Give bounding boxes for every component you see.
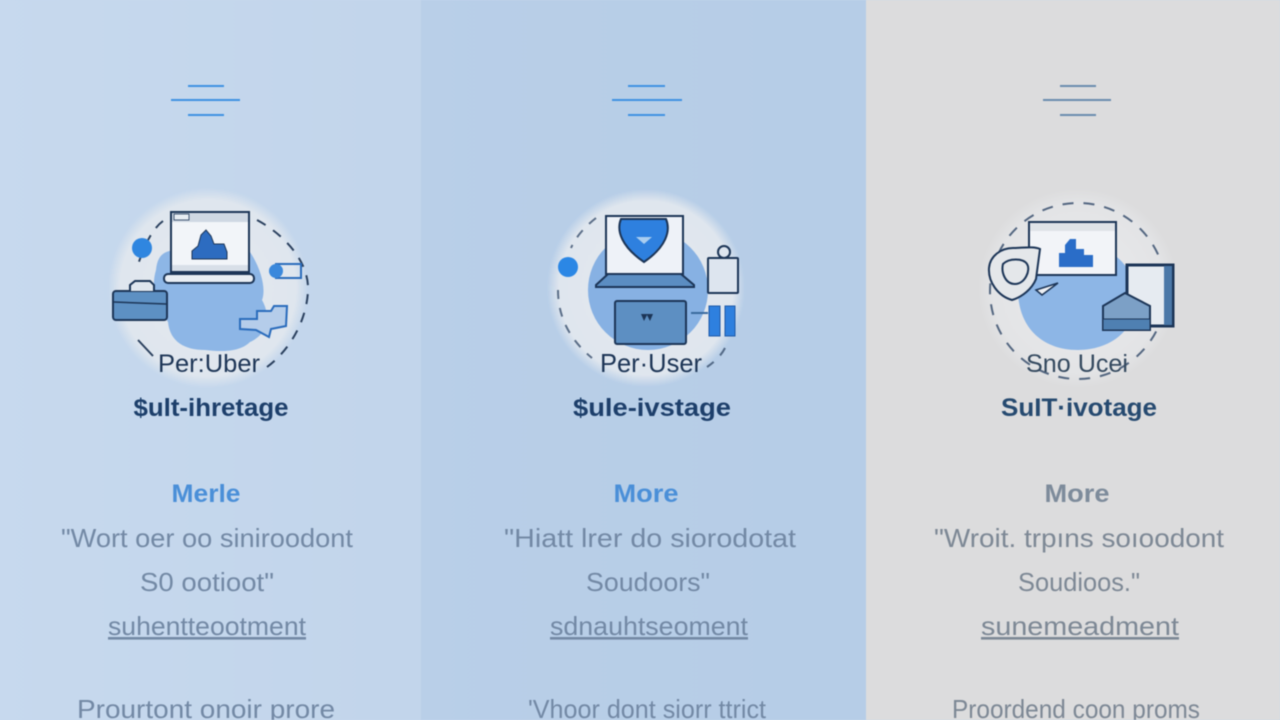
description: Soudioos." <box>1018 567 1140 597</box>
description: "Wort oer oo siniroodont <box>61 523 354 553</box>
description <box>61 523 354 720</box>
link label: More <box>1044 480 1110 508</box>
icon: security illustration <box>547 189 745 387</box>
description: sdnauhtseoment <box>550 611 749 641</box>
label: Per:Uber <box>158 350 260 378</box>
icon: menu lines <box>171 86 240 115</box>
description: sunemeadment <box>981 611 1180 641</box>
description: Soudoors" <box>586 567 710 597</box>
icon: workspace illustration <box>108 188 308 388</box>
icon: document illustration <box>978 188 1178 388</box>
heading: $ult-ihretage <box>134 394 289 422</box>
description <box>934 523 1225 720</box>
icon: menu lines <box>612 86 682 115</box>
heading: $ule-ivstage <box>573 394 731 422</box>
panel: middle tier <box>421 0 866 720</box>
panel: left tier <box>0 0 421 720</box>
link label: Merle <box>172 480 241 508</box>
description <box>504 523 797 720</box>
heading: SuIT·ivotage <box>1001 394 1157 422</box>
description: "Wroit. trpıns soıoodont <box>934 523 1225 553</box>
description: suhentteootment <box>108 611 307 641</box>
link label: More <box>614 480 679 508</box>
label: Per·User <box>600 348 702 378</box>
description: S0 ootioot" <box>140 567 274 597</box>
panel: right tier <box>866 0 1280 720</box>
icon: menu lines <box>1043 86 1111 115</box>
description: "Hiatt lrer do siorodotat <box>504 523 797 553</box>
label: Sno Ucei <box>1026 350 1128 378</box>
